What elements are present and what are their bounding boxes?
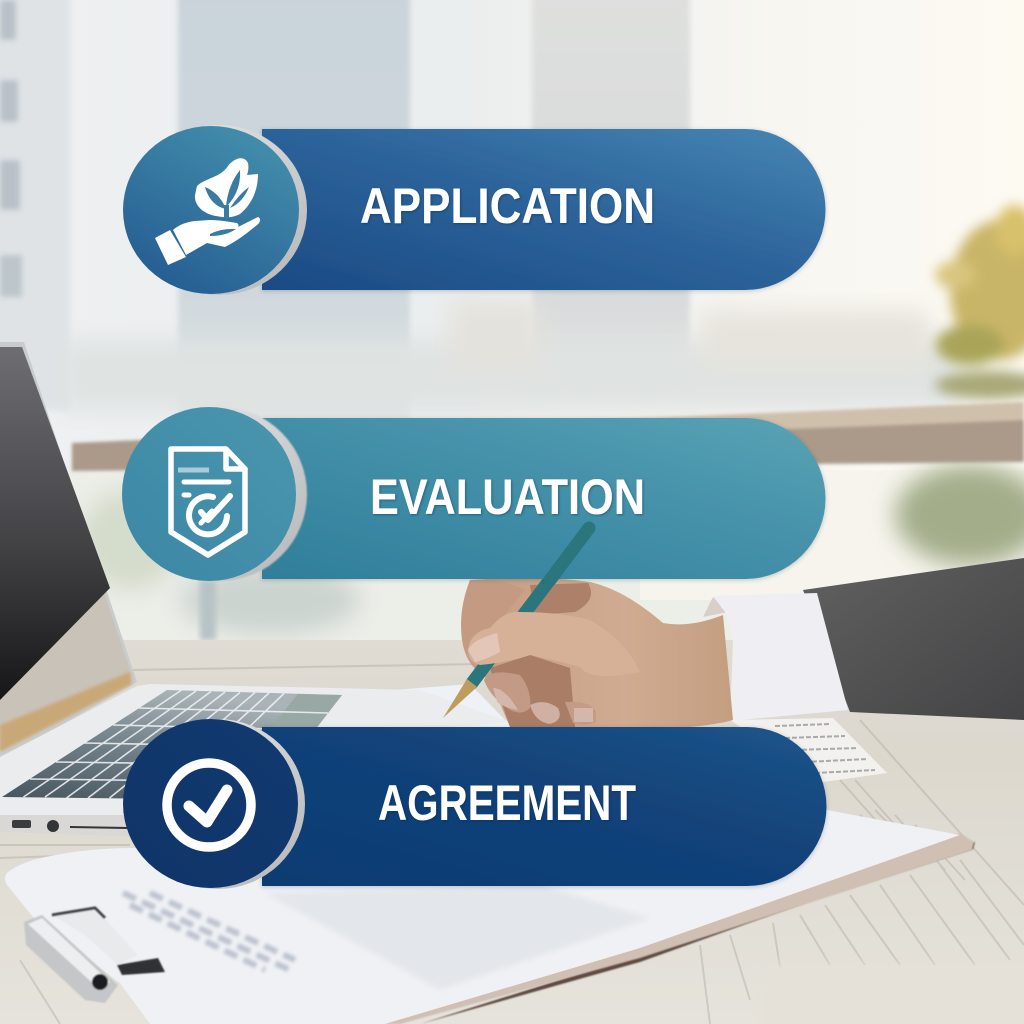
keyboard	[2, 690, 342, 800]
shirt cuff	[703, 593, 848, 721]
hand holding pen	[443, 528, 733, 727]
step 3: Agreement	[123, 719, 826, 889]
table	[0, 640, 1024, 1024]
ports	[12, 820, 128, 832]
bar	[262, 727, 826, 886]
label: EVALUATION	[370, 469, 645, 525]
clipboard with paper	[5, 810, 1024, 1024]
badge ring	[131, 719, 305, 889]
icon: check mark in circle	[167, 763, 251, 847]
badge circle	[123, 719, 298, 888]
yellow foliage	[935, 205, 1024, 399]
step 1: Application	[123, 125, 826, 295]
badge circle	[123, 126, 299, 294]
hand	[461, 578, 733, 727]
pen	[472, 528, 589, 683]
badge circle	[122, 407, 296, 581]
pen top overlapping evaluation bar	[550, 528, 589, 580]
blurred document rows	[123, 893, 295, 970]
laptop screen	[0, 342, 137, 760]
label: APPLICATION	[360, 178, 655, 234]
white sheet near pen tip	[330, 684, 515, 730]
badge ring	[133, 407, 307, 581]
small paper note	[730, 718, 887, 782]
fingers	[484, 672, 530, 713]
bar	[262, 418, 826, 579]
label: AGREEMENT	[378, 775, 636, 831]
step 2: Evaluation	[122, 407, 826, 581]
suit sleeve	[803, 558, 1024, 720]
badge ring	[131, 125, 307, 295]
railing	[72, 402, 1024, 471]
icon: document with check	[171, 449, 245, 555]
icon: hand holding plant	[155, 158, 260, 265]
laptop base	[0, 684, 510, 837]
laptop	[0, 342, 510, 837]
bar	[262, 129, 826, 290]
silver pen clip	[24, 908, 165, 1003]
thumb	[468, 612, 640, 676]
